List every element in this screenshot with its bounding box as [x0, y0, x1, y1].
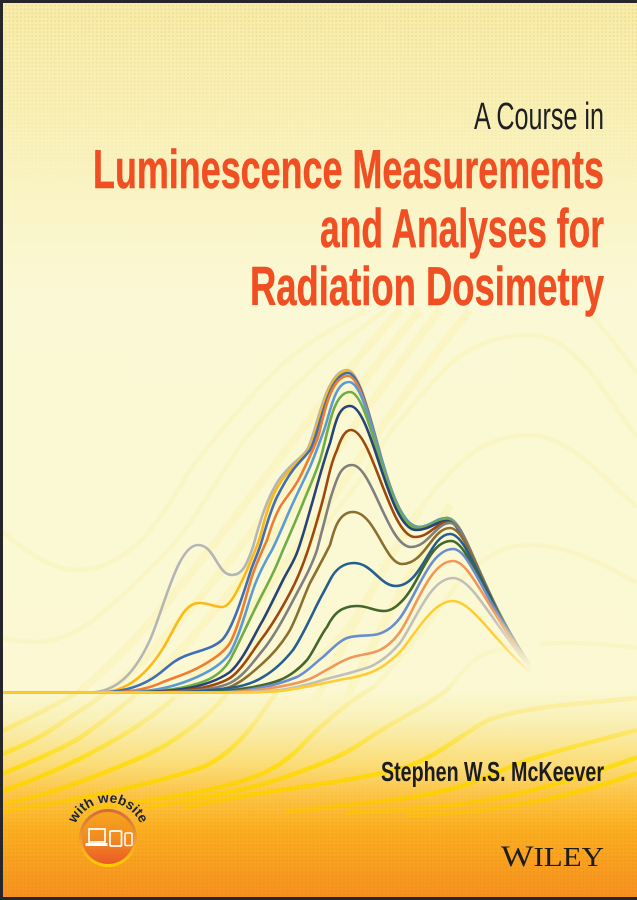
icon: tablet	[110, 831, 122, 846]
top dot texture	[4, 4, 637, 154]
icon: phone	[125, 833, 132, 846]
publisher logo: WILEY	[501, 840, 604, 873]
wide pale fan bands	[81, 310, 470, 700]
with website badge	[69, 794, 146, 867]
curve tail fade	[490, 590, 540, 685]
bottom dot texture	[5, 800, 637, 880]
flowing background waves	[0, 310, 637, 815]
icon: laptop	[86, 829, 108, 844]
main title	[93, 138, 604, 317]
glow curve chart	[3, 370, 532, 692]
badge label: with website	[69, 794, 146, 822]
